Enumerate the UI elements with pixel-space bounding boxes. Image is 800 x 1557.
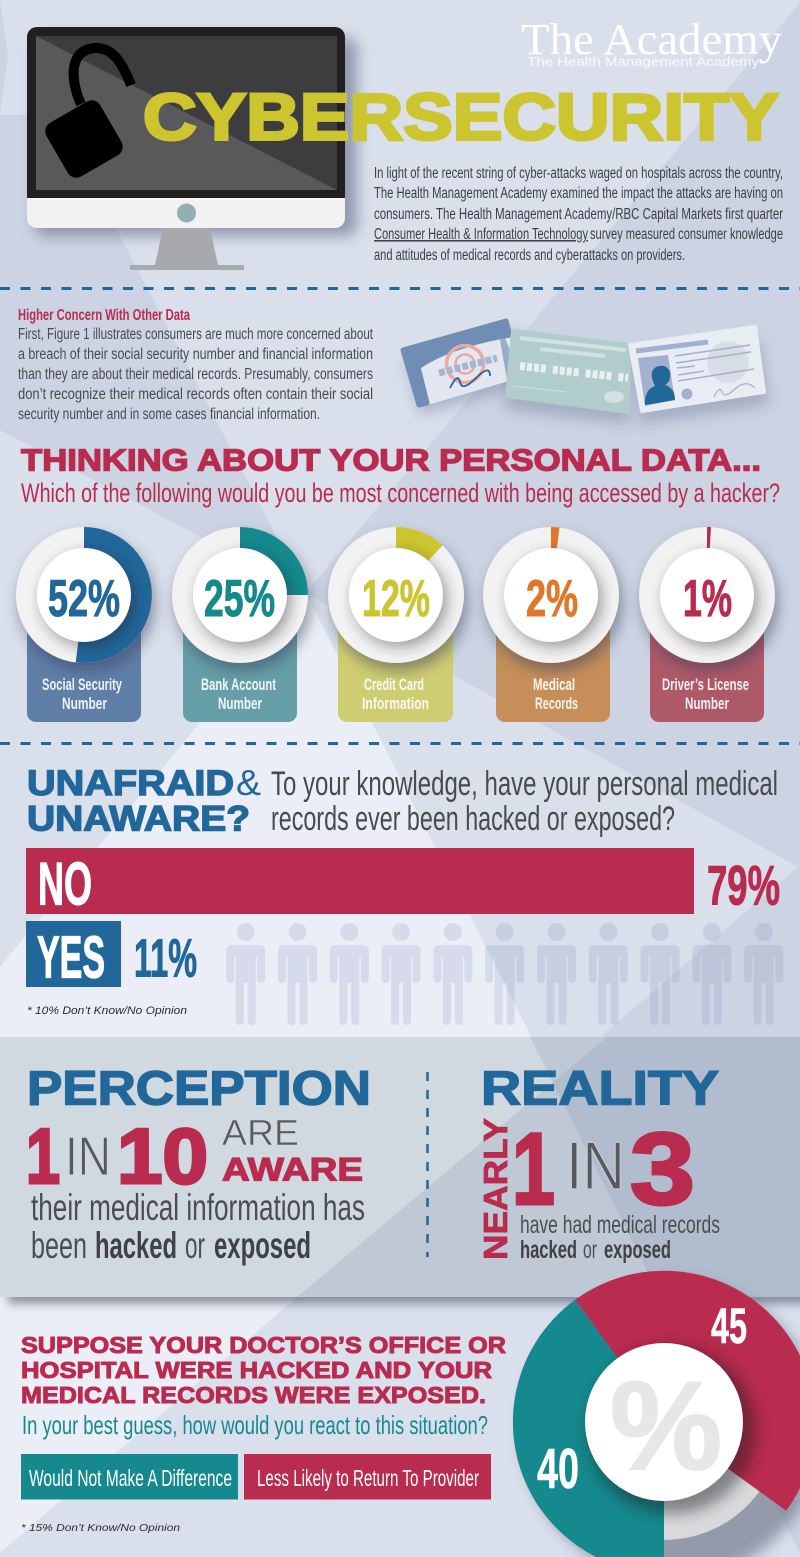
- panel: perception vs reality: [0, 1037, 800, 1303]
- question text: [271, 765, 778, 838]
- section text: higher concern: don’t recognize their medical records often contain their social: [18, 386, 373, 403]
- bar: yes 11%: 11%: [134, 928, 197, 988]
- donut chart: reaction: %: [610, 1357, 722, 1496]
- footnote: * 15% Don’t Know/No Opinion: [21, 1522, 180, 1534]
- bar: no 79%: [26, 848, 780, 918]
- reality: 3: [630, 1112, 695, 1226]
- bar: no 79%: NO: [38, 850, 92, 918]
- donut chart: reaction: [513, 1271, 800, 1557]
- heading: unafraid and unaware: &: [236, 762, 261, 803]
- item: medical records 2%: Medical: [533, 675, 575, 694]
- donut chart: reaction: 45: [711, 1298, 747, 1354]
- donut chart: reaction: 40: [537, 1437, 579, 1501]
- reality: exposed: [604, 1236, 671, 1264]
- heading: suppose hacked: MEDICAL RECORDS WERE EXPOSED.: [21, 1382, 486, 1408]
- heading: suppose hacked: HOSPITAL WERE HACKED AND YOUR: [21, 1357, 492, 1383]
- perception: exposed: [214, 1225, 311, 1266]
- perception: AWARE: [222, 1152, 363, 1188]
- item: social security number 52%: Number: [62, 694, 107, 713]
- section text: higher concern: Higher Concern With Other Data: [18, 307, 190, 324]
- icon: padlock: [42, 48, 131, 181]
- item: medical records 2%: Records: [535, 694, 578, 713]
- item: bank account number 25%: [172, 527, 311, 722]
- section text: higher concern: First, Figure 1 illustrates consumers are much more concerned about: [18, 326, 374, 343]
- item: driver's license number 1%: 1%: [683, 570, 732, 628]
- chart: data concern donuts: [16, 527, 778, 722]
- subheading: In your best guess, how would you react to this situation?: [22, 1410, 488, 1440]
- legend: would not make a difference: Would Not Make A Difference: [29, 1465, 232, 1491]
- heading: suppose hacked: SUPPOSE YOUR DOCTOR’S OFFICE OR: [21, 1332, 506, 1358]
- heading: unafraid and unaware: UNAWARE?: [27, 800, 250, 838]
- perception: or: [185, 1225, 205, 1266]
- heading: thinking about your personal data: [21, 442, 780, 508]
- section text: higher concern: security number and in some cases financial information.: [18, 406, 320, 423]
- item: social security number 52%: [16, 527, 155, 722]
- heading: suppose hacked: [21, 1332, 506, 1408]
- heading: unafraid and unaware: UNAFRAID: [27, 764, 234, 803]
- heading: unafraid and unaware: [27, 762, 261, 838]
- intro text: Consumer Health & Information Technology: [374, 226, 588, 243]
- section text: higher concern: a breach of their social security number and financial information: [18, 346, 373, 363]
- pictogram: people row: [226, 923, 783, 1025]
- icon: computer monitor with open padlock: [27, 27, 357, 270]
- perception: 1: [26, 1112, 60, 1200]
- reality: IN: [566, 1128, 625, 1204]
- illustration: identity cards: [403, 321, 770, 425]
- reality: [477, 1062, 720, 1264]
- logo: The Academy: [521, 15, 782, 64]
- item: bank account number 25%: 25%: [204, 570, 275, 628]
- icon: credit card: [507, 331, 629, 412]
- reality: NEARLY: [477, 1118, 514, 1260]
- item: driver's license number 1%: Number: [685, 694, 729, 713]
- heading: thinking about your personal data: THINKING ABOUT YOUR PERSONAL DATA...: [21, 442, 761, 478]
- item: driver's license number 1%: Driver’s License: [662, 675, 749, 694]
- perception: IN: [65, 1125, 111, 1187]
- item: social security number 52%: 52%: [48, 570, 120, 628]
- legend: would not make a difference: [21, 1454, 238, 1500]
- item: credit card information 12%: Credit Card: [364, 675, 424, 694]
- reality: hacked: [520, 1236, 577, 1264]
- item: social security number 52%: Social Security: [42, 675, 122, 694]
- intro text: [374, 165, 783, 264]
- icon: driver's license: [630, 327, 764, 411]
- perception: PERCEPTION: [27, 1062, 371, 1116]
- reality: REALITY: [481, 1062, 719, 1116]
- reality: or: [583, 1236, 597, 1264]
- icon: social security card: [403, 321, 520, 405]
- item: credit card information 12%: 12%: [362, 570, 430, 628]
- item: bank account number 25%: Bank Account: [201, 675, 276, 694]
- perception: been: [31, 1225, 87, 1266]
- item: bank account number 25%: Number: [218, 694, 262, 713]
- item: driver's license number 1%: [639, 527, 778, 722]
- logo: The Health Management Academy: [527, 54, 760, 69]
- title: CYBERSECURITY: [143, 80, 779, 154]
- reality: 1: [512, 1112, 555, 1226]
- intro text: and attitudes of medical records and cyberattacks on providers.: [374, 247, 685, 264]
- perception: [26, 1062, 371, 1266]
- perception: hacked: [95, 1225, 177, 1266]
- item: medical records 2%: 2%: [526, 570, 578, 628]
- perception: their medical information has: [31, 1187, 365, 1228]
- item: credit card information 12%: [328, 527, 467, 722]
- reality: have had medical records: [520, 1211, 720, 1239]
- bar: yes 11%: YES: [37, 924, 105, 990]
- bar: yes 11%: [26, 921, 197, 990]
- legend: less likely to return: [244, 1454, 491, 1500]
- section text: higher concern: than they are about their medical records. Presumably, consumers: [18, 366, 373, 383]
- footnote: * 10% Don’t Know/No Opinion: [27, 1005, 187, 1017]
- item: credit card information 12%: Information: [362, 694, 429, 713]
- legend: less likely to return: Less Likely to Return To Provider: [257, 1465, 479, 1491]
- section text: higher concern: [18, 307, 374, 423]
- perception: 10: [117, 1112, 208, 1200]
- perception: ARE: [222, 1112, 299, 1153]
- item: medical records 2%: [483, 527, 622, 722]
